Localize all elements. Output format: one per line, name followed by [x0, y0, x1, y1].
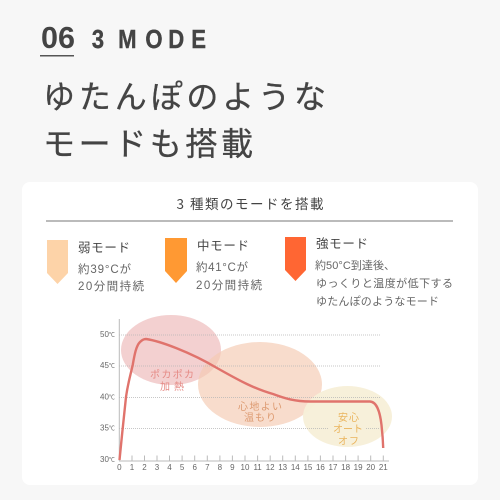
comfort zone label — [238, 400, 282, 424]
x axis labels: 19 — [354, 463, 363, 472]
y axis labels: 50℃ — [100, 330, 115, 339]
warm-up zone label: 加熱 — [160, 380, 184, 393]
ellipse: warm-up zone — [121, 315, 221, 385]
medium mode text — [196, 238, 262, 292]
main heading: モードも搭載 — [43, 126, 253, 162]
x axis labels: 15 — [303, 463, 313, 472]
temperature curve — [120, 339, 383, 460]
icon: strong mode marker — [285, 237, 306, 281]
x axis labels: 18 — [341, 463, 351, 472]
warm-up zone label: ポカポカ — [150, 369, 194, 381]
auto-off zone label: オフ — [338, 436, 359, 448]
strong mode text: 約50°C到達後、 — [315, 258, 395, 272]
x axis labels: 16 — [316, 463, 325, 472]
axes — [119, 319, 389, 461]
weak mode text — [78, 241, 144, 293]
x axis labels: 14 — [291, 463, 300, 472]
x axis labels: 13 — [278, 463, 288, 472]
x axis labels: 21 — [379, 463, 388, 472]
main heading — [43, 79, 326, 162]
weak mode text: 弱モード — [78, 241, 130, 255]
x axis labels: 10 — [241, 463, 250, 472]
x axis labels: 4 — [167, 463, 172, 472]
x axis labels: 11 — [253, 463, 262, 472]
section label: 3MODE — [92, 25, 206, 54]
ellipse: comfort zone — [198, 342, 322, 427]
x axis labels: 5 — [180, 463, 185, 472]
strong mode text: ゆたんぽのようなモード — [316, 295, 439, 308]
x axis labels: 20 — [366, 463, 376, 472]
x axis labels: 6 — [192, 463, 197, 472]
y axis labels: 45℃ — [100, 361, 115, 370]
warm-up zone label — [150, 369, 194, 393]
grid lines — [119, 335, 380, 428]
ellipse: auto-off zone — [303, 386, 392, 447]
x axis labels: 9 — [230, 463, 235, 472]
strong mode text — [315, 237, 453, 308]
x axis labels — [117, 463, 388, 472]
chart: temperature over time — [100, 315, 392, 472]
icon: medium mode marker — [165, 238, 187, 283]
x axis labels: 3 — [155, 463, 160, 472]
section number: 06 — [41, 20, 75, 55]
card heading: 3 種類のモードを搭載 — [176, 193, 324, 213]
medium mode text: 20分間持続 — [196, 278, 262, 292]
y axis labels: 40℃ — [100, 392, 115, 402]
strong mode text: 強モード — [316, 237, 368, 251]
strong mode text: ゆっくりと温度が低下する — [316, 276, 453, 290]
auto-off zone label: 安心 — [338, 412, 359, 424]
y axis labels — [100, 330, 115, 464]
x axis labels: 1 — [130, 463, 135, 472]
x axis labels: 8 — [218, 463, 223, 472]
x axis labels: 7 — [205, 463, 210, 472]
weak mode text: 約39°Cが — [78, 262, 132, 276]
panel: modes card — [22, 182, 478, 485]
comfort zone label: 温もり — [244, 412, 276, 424]
auto-off zone label — [333, 412, 363, 448]
auto-off zone label: オート — [333, 424, 363, 436]
x axis labels: 0 — [117, 463, 122, 472]
icon: weak mode marker — [47, 240, 68, 284]
main heading: ゆたんぽのような — [43, 79, 326, 115]
comfort zone label: 心地よい — [238, 400, 282, 413]
medium mode text: 約41°Cが — [196, 260, 248, 274]
medium mode text: 中モード — [197, 238, 249, 253]
x axis labels: 17 — [329, 463, 338, 472]
y axis labels: 35℃ — [100, 424, 115, 432]
x axis labels: 2 — [142, 463, 147, 472]
weak mode text: 20分間持続 — [78, 279, 144, 293]
x axis labels: 12 — [266, 463, 275, 472]
y axis labels: 30℃ — [100, 455, 115, 464]
